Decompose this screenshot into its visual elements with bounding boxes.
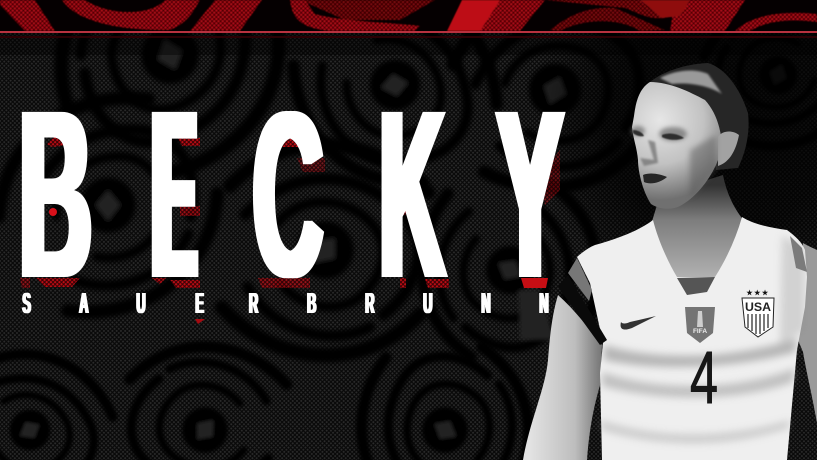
swoosh: [621, 316, 656, 330]
top band: red roses: [0, 0, 817, 38]
ear: [718, 131, 739, 166]
title: first name: Y: [497, 60, 563, 328]
right arm: [798, 243, 817, 423]
sleeve patch: [568, 258, 592, 301]
hair highlight: [660, 71, 722, 94]
nose shadow: [640, 140, 658, 166]
red horizontal rule: [0, 31, 817, 33]
title: first name: E: [153, 61, 195, 329]
USA crest: [742, 289, 774, 337]
jersey shading: [600, 235, 805, 443]
face: [632, 82, 722, 209]
FIFA badge: FIFA: [693, 328, 707, 335]
red accents behind name: [20, 137, 560, 324]
brows and eyes: [633, 130, 684, 140]
cheek shadow: [690, 135, 716, 198]
title: first name: K: [379, 61, 445, 329]
FIFA badge: [685, 307, 715, 343]
neck: [650, 175, 745, 280]
USA crest: ★★★: [746, 289, 770, 297]
black arm band: [558, 275, 607, 345]
title: first name: C: [253, 64, 323, 327]
title: first name: B: [19, 61, 92, 329]
left arm: [523, 295, 602, 460]
jersey number: 4: [690, 338, 718, 419]
jersey: [577, 217, 807, 460]
subtitle: surname: SAUERBRUNN: [22, 287, 549, 319]
title: first name: [19, 60, 563, 329]
player photo: [523, 63, 817, 460]
USA crest: USA: [745, 300, 771, 314]
collar: [677, 277, 715, 295]
mouth: [643, 174, 667, 183]
eye sockets: [631, 126, 687, 141]
shoulder patch: [790, 236, 807, 272]
hair: [648, 63, 749, 170]
